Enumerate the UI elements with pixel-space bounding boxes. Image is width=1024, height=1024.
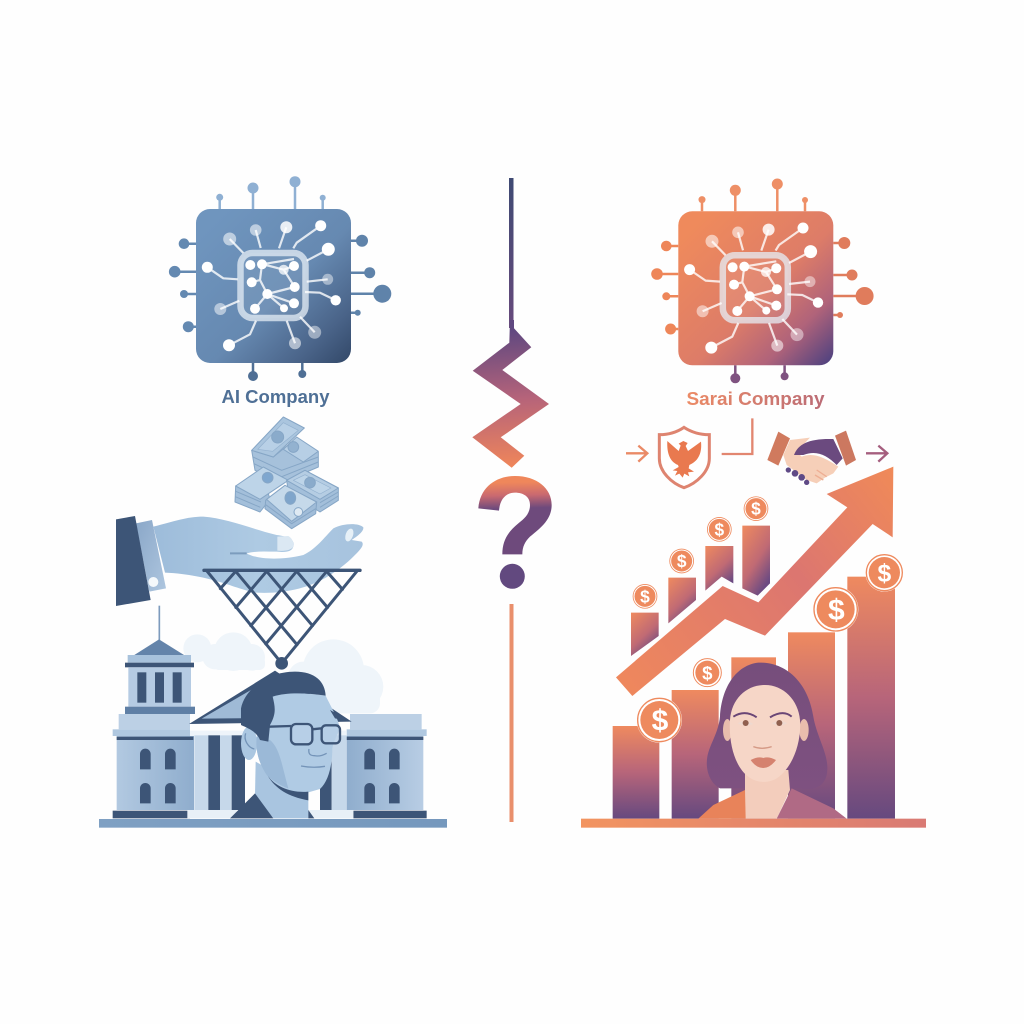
icon: AI chip [169, 176, 391, 381]
small bars [631, 526, 770, 656]
base bar [581, 819, 926, 828]
icon: shield with eagle [659, 427, 709, 488]
panel: Sarai Company scene [581, 418, 926, 828]
large coins: $ [702, 662, 713, 683]
building: right wing [347, 714, 427, 818]
clouds [183, 632, 383, 713]
icon: net [204, 570, 360, 670]
large coins: $ [877, 560, 891, 587]
small coins: $ [715, 519, 725, 539]
small coins: $ [640, 586, 650, 606]
divider: centre top line [509, 178, 514, 328]
building: portico [187, 671, 353, 818]
large coins: $ [652, 705, 669, 738]
divider: centre bottom line [510, 604, 514, 822]
label: Sarai Company: Sarai Company [686, 389, 824, 409]
growth arrow [616, 467, 893, 696]
small coins: $ [677, 551, 687, 571]
icon: question mark [478, 476, 552, 589]
icon: money stacks [235, 417, 338, 529]
large coins: $ [828, 594, 845, 627]
icon: hand [116, 516, 363, 606]
small coins: $ [751, 499, 761, 519]
portrait: man with glasses [230, 672, 351, 818]
icon: zigzag lightning [472, 320, 549, 468]
flow arrow: right [866, 446, 887, 462]
label: AI Company: AI Company [222, 387, 330, 407]
large bars [613, 577, 895, 819]
flow arrow: left [626, 446, 647, 462]
portrait: woman [698, 663, 847, 819]
small coins [633, 496, 768, 609]
large coins [637, 554, 903, 743]
icon: handshake [767, 431, 856, 485]
building: left wing and cupola [113, 606, 195, 818]
connector: L line [722, 418, 752, 454]
panel: AI Company scene [99, 417, 447, 828]
icon: Sarai chip [651, 178, 874, 383]
base bar [99, 819, 447, 828]
